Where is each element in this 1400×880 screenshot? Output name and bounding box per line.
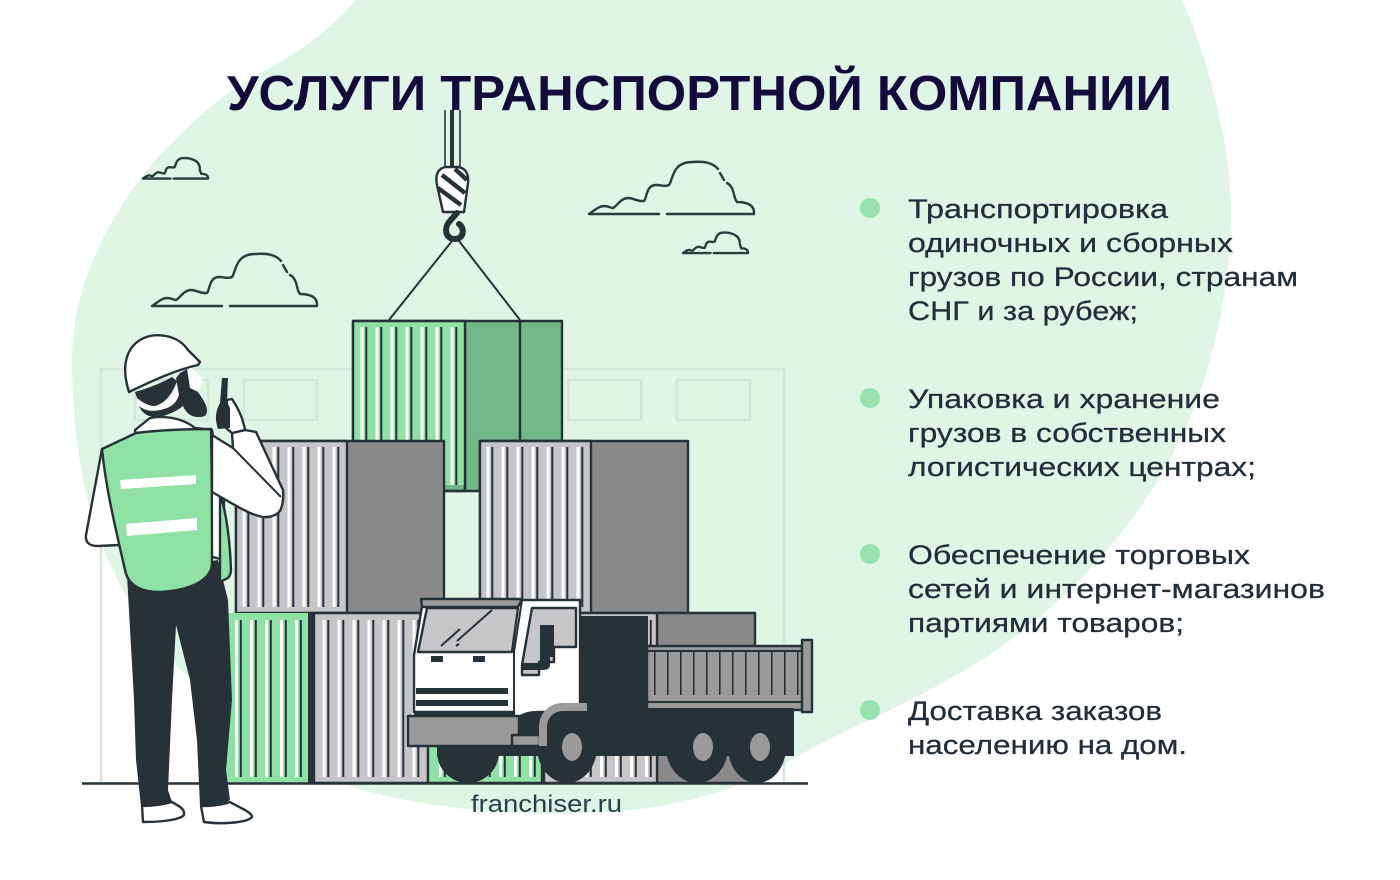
crane hook with slings <box>389 110 520 320</box>
item 2: Упаковка и хранение <box>908 384 1220 414</box>
building backdrop <box>101 369 784 783</box>
item 1: СНГ и за рубеж; <box>908 296 1138 326</box>
item 3: партиями товаров; <box>908 608 1184 638</box>
truck bed <box>647 640 812 712</box>
item 4 <box>860 696 1187 760</box>
item 1: Транспортировка <box>908 194 1169 224</box>
vest <box>102 429 212 592</box>
cloud top left <box>143 158 208 179</box>
wheel hubs <box>562 733 770 761</box>
hook block <box>436 167 468 212</box>
item 4: Доставка заказов <box>908 696 1162 726</box>
trousers <box>127 560 232 806</box>
item 1: одиночных и сборных <box>908 228 1234 258</box>
chassis and wheels <box>414 616 794 783</box>
slings <box>389 241 520 320</box>
container: green under truck <box>428 700 542 783</box>
item 1 <box>860 194 1298 326</box>
containers stack <box>226 321 755 783</box>
cloud right small <box>683 233 748 253</box>
container: grey middle left <box>236 441 444 613</box>
container: grey bottom right <box>544 613 755 783</box>
worker <box>86 335 283 823</box>
item 2 <box>860 384 1256 482</box>
truck <box>408 599 812 783</box>
hand with radio <box>216 378 245 433</box>
source: franchiser.ru <box>471 791 622 818</box>
list of services <box>860 194 1325 760</box>
item 3 <box>860 540 1325 638</box>
head hair and beard <box>135 366 207 417</box>
item 3: Обеспечение торговых <box>908 540 1251 570</box>
container: hanging green <box>353 321 562 491</box>
item 4: населению на дом. <box>908 730 1187 760</box>
right sleeve <box>212 430 283 517</box>
cloud right large <box>589 162 754 214</box>
item 2: логистических центрах; <box>908 452 1256 482</box>
title: УСЛУГИ ТРАНСПОРТНОЙ КОМПАНИИ <box>227 66 1172 121</box>
right side green back <box>220 495 231 582</box>
hook <box>446 213 463 239</box>
shirt <box>135 417 224 560</box>
bumper <box>408 707 587 746</box>
cab <box>414 599 580 722</box>
sleeve fold <box>233 448 281 497</box>
item 2: грузов в собственных <box>908 418 1227 448</box>
container: grey middle right <box>480 441 688 613</box>
item 1: грузов по России, странам <box>908 262 1298 292</box>
shoes <box>142 802 252 823</box>
item 3: сетей и интернет-магазинов <box>908 574 1325 604</box>
container: grey bottom <box>314 613 428 783</box>
helmet <box>125 335 200 392</box>
ground line <box>82 782 808 785</box>
container: green bottom left <box>226 613 314 783</box>
background blob <box>72 0 1231 814</box>
left arm <box>86 449 125 546</box>
cloud left large <box>152 254 317 306</box>
